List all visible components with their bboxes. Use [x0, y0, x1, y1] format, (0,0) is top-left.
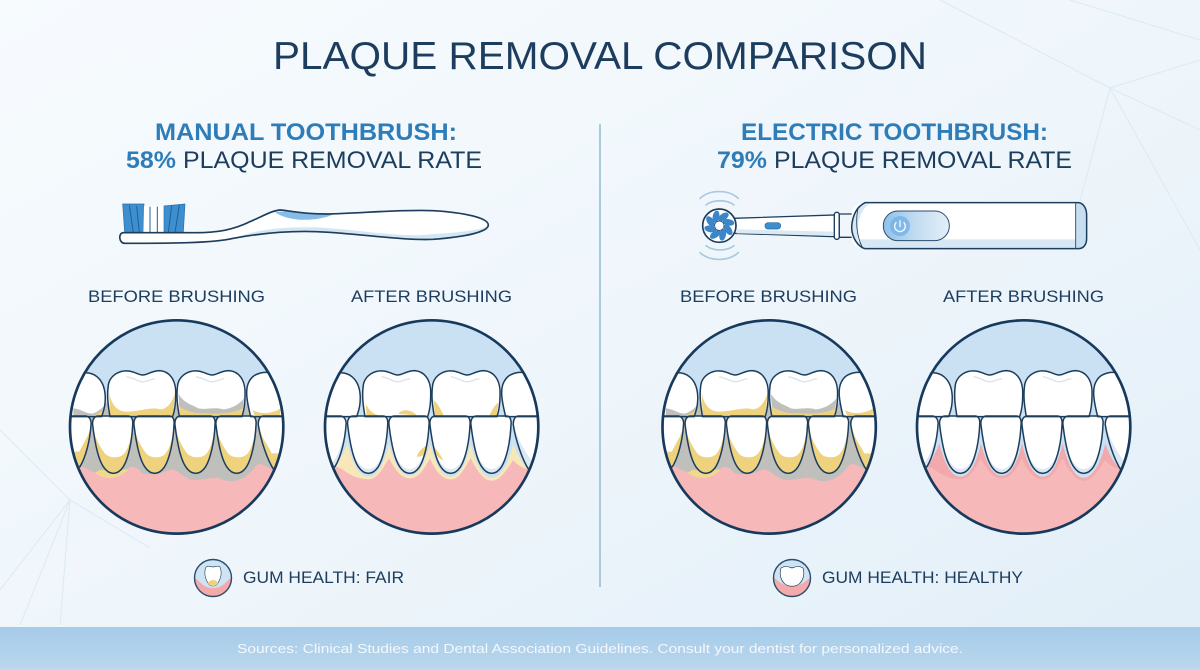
electric heading: ELECTRIC TOOTHBRUSH: — [741, 119, 1048, 146]
vibration arcs — [700, 192, 738, 259]
electric heading — [717, 119, 1072, 174]
circle: electric after brushing — [916, 319, 1132, 535]
text: gum health fair: GUM HEALTH: FAIR — [243, 569, 404, 587]
manual heading: PLAQUE REMOVAL RATE — [183, 147, 482, 174]
text: gum health healthy: GUM HEALTH: HEALTHY — [822, 569, 1023, 587]
electric heading: 79% — [717, 147, 767, 174]
title: PLAQUE REMOVAL COMPARISON — [273, 35, 927, 78]
panel: electric toothbrush — [652, 119, 1147, 598]
footer — [0, 627, 1200, 669]
manual heading — [126, 119, 482, 174]
panel: manual toothbrush — [60, 119, 555, 598]
label: after brushing (manual): AFTER BRUSHING — [351, 287, 512, 306]
icon: gum healthy — [772, 560, 812, 598]
gum health: fair — [193, 560, 404, 598]
manual heading: MANUAL TOOTHBRUSH: — [155, 119, 457, 146]
label: before brushing (electric): BEFORE BRUSHING — [680, 287, 857, 306]
manual heading: 58% — [126, 147, 176, 174]
icon: electric toothbrush — [700, 192, 1087, 259]
circle: manual before brushing — [60, 310, 300, 550]
circle: electric before brushing — [652, 310, 892, 550]
sources text: Sources: Clinical Studies and Dental Association Guidelines. Consult your dentist for personalized advice. — [237, 641, 963, 656]
icon: manual toothbrush — [120, 204, 488, 243]
electric heading: PLAQUE REMOVAL RATE — [774, 147, 1072, 174]
gum health: healthy — [772, 560, 1023, 598]
label: after brushing (electric): AFTER BRUSHING — [943, 287, 1104, 306]
circle: manual after brushing — [324, 319, 540, 535]
divider — [599, 124, 601, 587]
icon: gum fair — [193, 560, 233, 598]
label: before brushing (manual): BEFORE BRUSHING — [88, 287, 265, 306]
